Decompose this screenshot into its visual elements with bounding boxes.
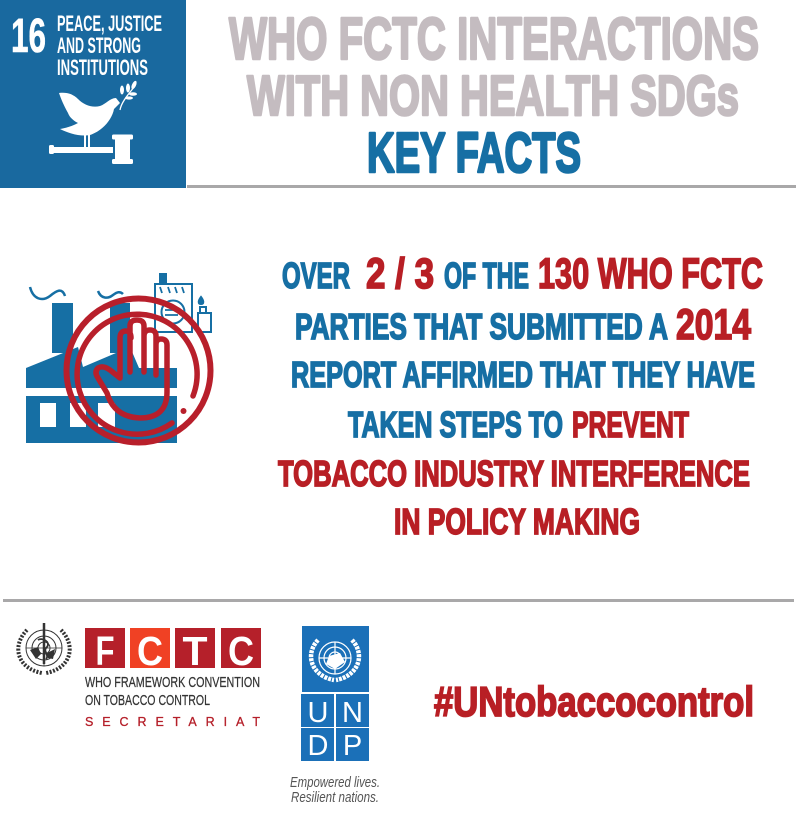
FCTC name [85,674,260,709]
icon: dove on gavel [49,80,138,164]
UNDP tagline: Resilient nations. [291,789,379,806]
UNDP letter tiles: P [343,730,362,762]
SDG number 16: 16 [11,10,46,63]
logo: UNDP [301,626,369,762]
SDG 16 name: INSTITUTIONS [57,55,148,80]
FCTC letter tiles: F [96,628,114,674]
title [229,6,759,185]
text block: key fact: OF THE [444,255,529,296]
text block: key fact: PREVENT [572,404,689,445]
FCTC letter tiles: T [182,628,208,674]
UN emblem [311,640,359,680]
header rule [187,185,796,188]
UNDP letter tiles: N [342,697,363,729]
text block: key fact: TAKEN STEPS TO [348,404,563,445]
FCTC letter tiles: C [228,628,254,674]
text block: key fact: OVER [282,255,350,296]
cigarette pack and lighter [155,274,211,332]
text block: key fact: 2014 [676,301,751,349]
text block: key fact: IN POLICY MAKING [394,501,640,542]
UNDP letter tiles [301,694,369,762]
panel: SDG 16 badge [0,0,186,188]
factory [26,287,177,443]
SDG 16 name: AND STRONG [57,33,141,58]
text block: key fact: PARTIES THAT SUBMITTED A [295,306,668,347]
raised hand [96,320,167,418]
SDG 16 name [57,11,162,80]
UNDP tagline [290,774,380,806]
footer rule [3,599,794,602]
text block: key fact [278,250,763,542]
stop sign rings [66,298,210,442]
logo: FCTC secretariat [85,628,261,729]
icon: factory and cigarettes with stop hand [26,274,211,443]
secretariat label: SECRETARIAT [85,715,260,729]
FCTC name: ON TOBACCO CONTROL [85,692,210,709]
FCTC letter tiles [85,628,261,674]
UNDP letter tiles: D [308,730,328,762]
heading: key facts: KEY FACTS [367,121,581,185]
FCTC letter tiles: C [137,628,163,674]
UNDP tagline: Empowered lives. [290,774,380,791]
text block: key fact: 2 / 3 [366,250,434,298]
logo: WHO emblem [18,623,70,673]
SDG 16 name: PEACE, JUSTICE [57,11,162,36]
FCTC name: WHO FRAMEWORK CONVENTION [85,674,260,691]
UNDP letter tiles: U [308,697,328,729]
